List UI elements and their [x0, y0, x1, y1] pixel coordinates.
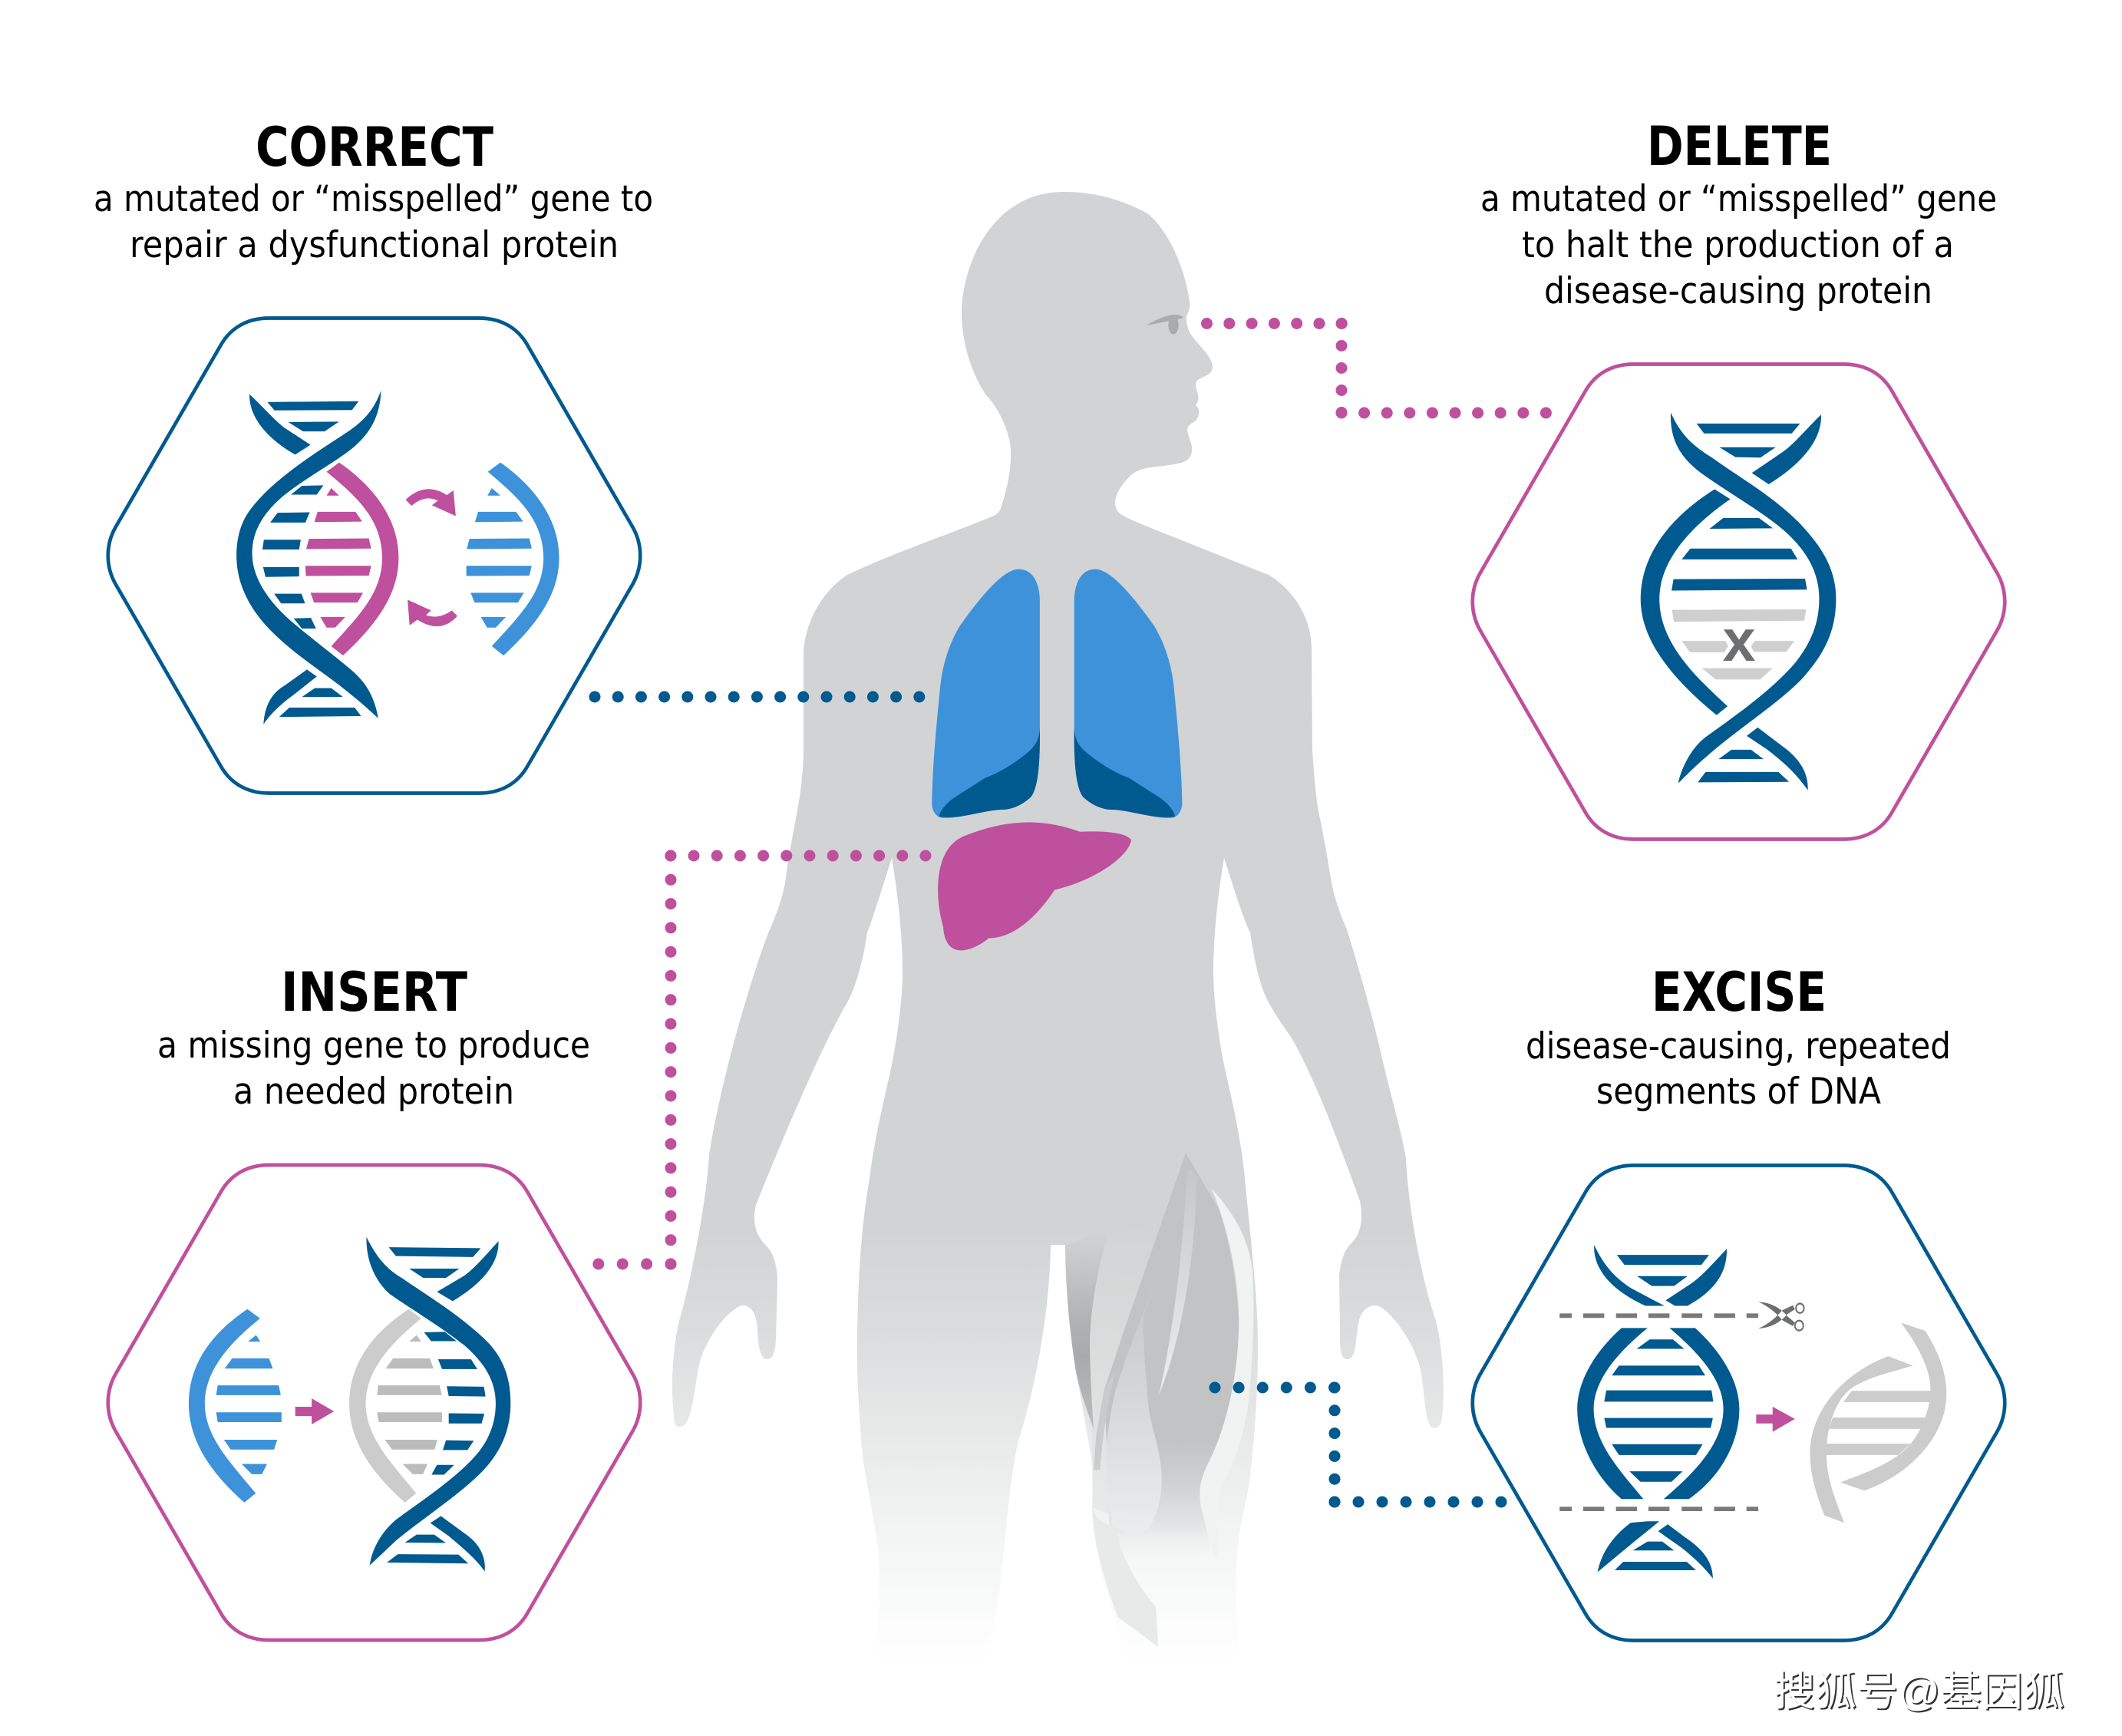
text block: insert description: a missing gene to produce — [157, 1025, 590, 1067]
text block: delete description — [1480, 178, 1997, 312]
hexagon frame: delete — [1473, 364, 2005, 840]
hexagon frame: correct — [108, 318, 640, 794]
heading: correct: CORRECT — [256, 116, 493, 179]
hexagon frame: insert — [108, 1165, 640, 1640]
text block: excise description: disease-causing, repeated — [1526, 1025, 1951, 1068]
organ: lungs — [932, 569, 1182, 818]
arrow: excise — [1756, 1407, 1795, 1432]
text block: delete description: to halt the production of a — [1522, 224, 1954, 266]
text block: insert description: a needed protein — [233, 1071, 514, 1113]
text block: correct description: a mutated or “misspelled” gene to — [94, 178, 653, 220]
panel: correct — [94, 116, 653, 794]
dna: helix with gray missing strand — [349, 1237, 510, 1571]
icon: scissors — [1758, 1302, 1804, 1331]
watermark: 搜狐号@基因狐 — [1774, 1668, 2064, 1715]
dna: light blue replacement strand — [467, 463, 559, 655]
dotted connector: muscle to excise — [1215, 1388, 1502, 1503]
text block: excise description: segments of DNA — [1596, 1071, 1881, 1113]
heading: delete: DELETE — [1647, 115, 1832, 178]
human body silhouette — [672, 192, 1444, 1664]
leg muscles — [1065, 1153, 1253, 1647]
text block: excise description — [1526, 1025, 1951, 1113]
dotted connector: liver to insert — [598, 856, 926, 1265]
hexagon frame: excise — [1473, 1165, 2005, 1641]
dna: light blue strand to insert — [189, 1309, 282, 1503]
text block: insert description — [157, 1025, 590, 1113]
text block: delete description: a mutated or “misspelled” gene — [1480, 178, 1997, 220]
heading: excise: EXCISE — [1652, 961, 1827, 1024]
panel: excise — [1473, 961, 2005, 1641]
dna: helix with deleted rungs — [1641, 413, 1836, 790]
arrow: insert — [295, 1398, 334, 1424]
icon: x mark: x — [1723, 608, 1756, 674]
heading: insert: INSERT — [281, 961, 467, 1024]
cut lines — [1559, 1315, 1758, 1509]
arrows: swap — [406, 489, 457, 626]
panel: delete — [1473, 115, 2005, 840]
organ: liver — [938, 823, 1131, 950]
icon: eye and brow — [1146, 315, 1183, 335]
dna: helix with pink strand being replaced — [236, 391, 398, 724]
dna: excised gray fragment — [1810, 1322, 1946, 1523]
dotted connector: lungs to correct — [595, 691, 920, 703]
text block: delete description: disease-causing protein — [1544, 270, 1932, 312]
watermark: 搜狐号@基因狐 — [1775, 1670, 2066, 1716]
text block: correct description: repair a dysfunctional protein — [130, 224, 619, 266]
dotted connector: eye to delete — [1206, 324, 1546, 414]
dna: helix cut into three segments — [1577, 1245, 1739, 1579]
text block: correct description — [94, 178, 653, 266]
panel: insert — [108, 961, 640, 1640]
